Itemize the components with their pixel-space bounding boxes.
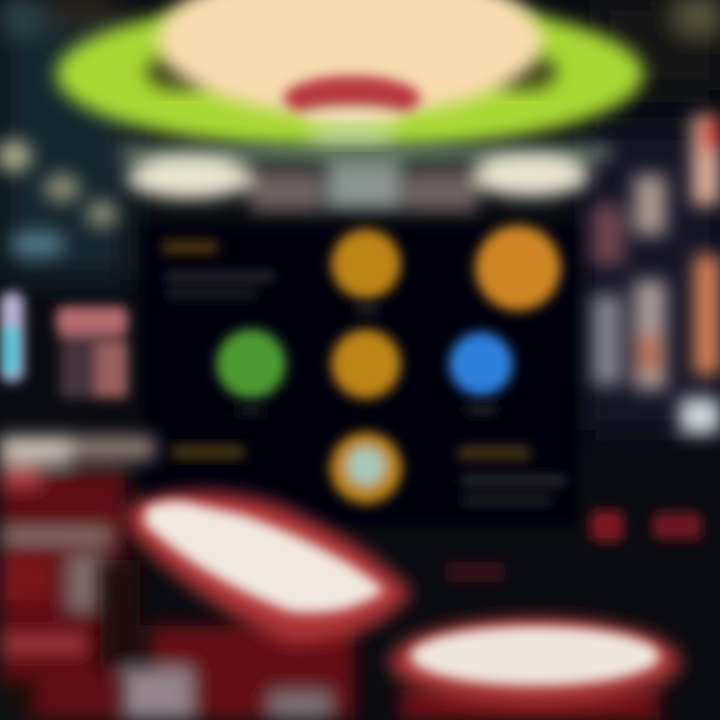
- ceiling light fixture: [56, 0, 644, 150]
- pale center below arc: [306, 126, 398, 146]
- white light band: [120, 146, 610, 212]
- text block bottom right: [458, 446, 566, 504]
- icon: ring circle bottom: [330, 432, 402, 504]
- left wall lights: [0, 140, 118, 258]
- green ceiling ring: [56, 0, 644, 150]
- red floor lights: [445, 510, 702, 582]
- icon: blue circle: [449, 332, 513, 396]
- icon: large orange circle top right: [475, 225, 561, 311]
- heading placeholder bottom left: [172, 444, 244, 460]
- faint labels: [236, 306, 496, 414]
- centre poker table: [100, 492, 412, 720]
- right poker table: [389, 618, 681, 720]
- right slot machines: [592, 115, 720, 434]
- dark ring shadow: [146, 54, 557, 90]
- background wall tones: [0, 0, 720, 430]
- left slot machines: [0, 292, 128, 398]
- heading placeholder top left: [162, 240, 274, 298]
- cream ceiling dome: [158, 0, 542, 116]
- icon: orange circle middle: [331, 329, 401, 399]
- red arc: [284, 76, 420, 124]
- icon: orange circle top centre: [331, 229, 401, 299]
- icon: green circle: [216, 329, 286, 399]
- panel: central dark board: [142, 226, 578, 526]
- left poker table: [0, 436, 155, 720]
